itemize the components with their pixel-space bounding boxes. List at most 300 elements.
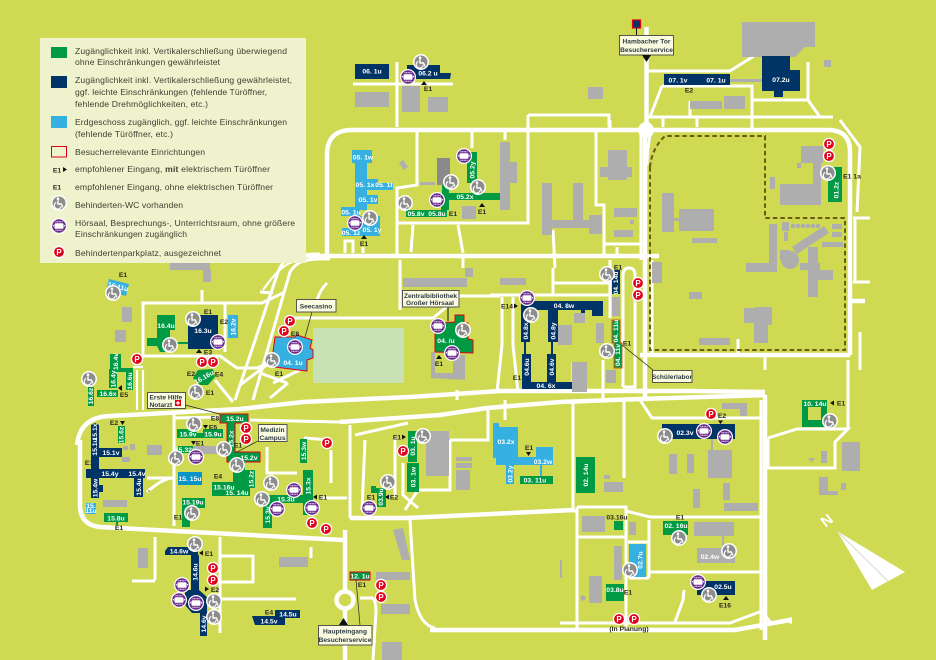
entrance E5 [118, 385, 128, 399]
building group 16.4v 16.4y 16.6u 16.6x: 16.4y [110, 370, 117, 388]
building group 15.3: 15.3x [305, 477, 312, 495]
icon: WC [206, 609, 222, 625]
icon: lecture hall [400, 69, 416, 85]
callout: Erste Hilfe Notarzt: Erste Hilfe [150, 394, 182, 402]
entrance E1: E1 [623, 340, 631, 348]
building 04.1u [273, 335, 313, 371]
icon: lecture hall [444, 345, 460, 361]
icon: WC [264, 352, 280, 368]
icon: WC [701, 587, 717, 603]
blue complex 05.1: 05. 1w [353, 154, 374, 162]
icon: lecture hall [347, 215, 363, 231]
building 15.11u: 11u [85, 508, 97, 515]
icon: parking: P [826, 140, 832, 149]
gate marker [632, 20, 640, 35]
building 15.8u [104, 513, 128, 525]
entrance E1: E1 [676, 514, 684, 522]
icon: WC [523, 307, 539, 323]
arrow: main entrance [339, 618, 348, 625]
blue complex 05.1: 05. 1v [359, 197, 378, 204]
callout: Seecasino [296, 300, 336, 337]
blue complex 05.1: 05. 1x [356, 182, 375, 189]
icon: parking: P [631, 615, 637, 624]
building 02.16u [663, 521, 688, 535]
entrance E16: E16 [719, 602, 731, 610]
building group 14.6: 14.6w [170, 548, 189, 556]
building 06.1u: 06. 1u [362, 68, 382, 76]
building group 15.3 [263, 439, 313, 528]
building group 16.4v 16.4y 16.6u 16.6x [97, 353, 134, 398]
icon: parking [632, 277, 644, 289]
buildings 03 [361, 423, 632, 601]
icon: parking: P [281, 327, 287, 336]
building 14.5v: 14.5v [260, 618, 278, 626]
legend: WC text: Behinderten-WC vorhanden [75, 200, 183, 210]
building 14.5u: 14.5u [279, 612, 297, 618]
icon: WC [657, 428, 673, 444]
legend panel [40, 38, 306, 263]
building 04.11: 04. 11u [613, 320, 620, 342]
icon: WC [162, 337, 178, 353]
entrance E2: E2 [718, 413, 726, 420]
entrance E1: E1 [424, 86, 432, 93]
building 04.1u: 04. 1u [283, 360, 303, 367]
icon: lecture hall [269, 501, 285, 517]
entrance E2 [385, 494, 398, 502]
legend: green swatch [51, 47, 67, 58]
entrance E8: E8 [211, 416, 219, 422]
icon: parking: P [826, 152, 832, 161]
callout: Schülerlabor [622, 345, 693, 382]
icon: lecture hall [188, 449, 204, 465]
icon: WC [81, 371, 97, 387]
building 15.2 red outlined: 15.2x [228, 430, 235, 448]
building 15.15u [178, 472, 202, 485]
leader line [356, 580, 360, 625]
building 03.11u: 03. 11u [524, 478, 546, 484]
entrance E2: E2 [685, 88, 693, 94]
callout: Haupteingang: Besucherservice [319, 637, 372, 644]
buildings 10 and 01 [802, 138, 861, 429]
roundabout north gate [638, 122, 654, 138]
building 16.6z: 16.6z [88, 387, 95, 404]
legend: green text [75, 46, 287, 67]
icon: parking: P [378, 581, 384, 590]
icon: WC [822, 413, 838, 429]
icon: WC [186, 416, 202, 432]
icon: parking: P [243, 435, 249, 444]
building 02.5u [697, 581, 735, 595]
entrance E1: E1 [478, 209, 486, 216]
building 02.3v: 02.3v [676, 430, 694, 437]
icon: WC [188, 384, 204, 400]
icon: parking [196, 356, 208, 368]
legend: lecture hall text: Einschränkungen zugänglich [75, 229, 187, 239]
callout: Medizin Campus: Medizin [260, 427, 285, 434]
icon: parking: P [243, 424, 249, 433]
buildings 04 [264, 264, 644, 390]
building 03.8u [606, 584, 624, 601]
entrance E5: E5 [120, 392, 128, 399]
icon: parking: P [309, 519, 315, 528]
legend: entrance with opener symbol: E1 [53, 168, 61, 174]
icon: parking [823, 150, 835, 162]
icon: parking: P [134, 355, 140, 364]
buildings 14 [165, 536, 300, 636]
main entrance area [339, 572, 387, 625]
legend: green text: ohne Einschränkungen gewährleistet [75, 57, 221, 67]
callout: Erste Hilfe Notarzt: Notarzt [150, 402, 173, 409]
icon: parking [705, 408, 717, 420]
building group 14.6 [165, 547, 208, 636]
building 04./u [435, 315, 473, 353]
entrance E1 [830, 400, 845, 408]
legend: navy text: ggf. leichte Einschränkungen (fehlende Türöffner, [75, 87, 267, 97]
building 03.8u: 03.8u [606, 587, 624, 594]
icon: lecture hall [188, 595, 204, 611]
icon: WC [184, 505, 200, 521]
building group 04.8 04.6: 04. 8w [554, 303, 575, 310]
entrance E1 [393, 434, 406, 442]
icon: WC [721, 543, 737, 559]
building 04.11: 04. 11v [615, 344, 622, 366]
icon: parking [320, 523, 332, 535]
building 15.19u [182, 498, 205, 527]
green complex 05.2: 05.8u [428, 211, 446, 218]
green complex 05.2: 05.2y [470, 161, 477, 179]
entrance E1 [478, 203, 486, 216]
building 16.3u: 16.3u [194, 328, 212, 335]
entrance E1 [525, 445, 533, 456]
entrance E1: E1 [393, 434, 401, 442]
building 07.1 [664, 74, 730, 85]
grey buildings [103, 22, 860, 660]
building 03.9u [371, 486, 386, 507]
blue complex 05.1: 05. 1z [342, 230, 361, 237]
icon: WC [671, 530, 687, 546]
building 03.2: 03.2x [497, 439, 515, 446]
icon: parking [321, 437, 333, 449]
callout: Haupteingang: Haupteingang [323, 628, 367, 636]
entrance E2: E2 [187, 371, 195, 378]
icon: lecture hall [304, 500, 320, 516]
icon: WC [599, 266, 615, 282]
building 07.1: 07. 1u [706, 78, 726, 84]
building 02.3v [662, 424, 735, 439]
callout: Erste Hilfe Notarzt [148, 392, 220, 414]
entrance E1: E1 [196, 440, 204, 448]
icon: parking [240, 422, 252, 434]
legend: navy swatch [51, 76, 67, 88]
entrance E1: E1 [367, 494, 375, 502]
entrance E2: E2 [211, 587, 219, 594]
building 15.11u [85, 503, 97, 515]
icon: WC [216, 441, 232, 457]
building 03.1u [408, 431, 417, 462]
building 03.1w: 03. 1w [410, 466, 417, 487]
icon: WC [415, 428, 431, 444]
north-east road end arrow [780, 617, 792, 624]
building 16.4u: 16.4u [157, 323, 175, 330]
legend: navy text: Zugänglichkeit inkl. Vertikalerschließung gewährleistet, [75, 75, 292, 85]
icon: lecture hall [717, 429, 733, 445]
building group 15.1 15.4: 15.4y [101, 471, 119, 478]
building group 16.4v 16.4y 16.6u 16.6x: 16.6x [99, 391, 117, 398]
entrance E5: E5 [209, 424, 217, 432]
icon: parking [397, 445, 409, 457]
building group 04.8 04.6: 04. 6x [537, 383, 556, 390]
building 16.11u: 16.11u [107, 282, 129, 293]
icon: parking [284, 315, 296, 327]
icon: WC [443, 174, 459, 190]
lawn rectangle [313, 328, 404, 383]
note: in planning: (In Planung) [609, 626, 649, 633]
entrance E2: E2 [110, 420, 118, 427]
entrance E1: E1 [119, 272, 127, 279]
entrance E1: E1 [275, 371, 283, 378]
entrance E4: E4 [265, 610, 273, 616]
icon: WC [168, 450, 184, 466]
building 15.2 red outlined [220, 414, 260, 462]
legend: parking icon: P [56, 248, 62, 257]
building 15.16u 15.14u 15.2z: 15.2z [249, 470, 256, 487]
legend: entrance text: empfohlener Eingang, ohne elektrischen Türöffner [75, 182, 273, 192]
building 03.16u [606, 514, 628, 530]
callout: Schülerlabor: Schülerlabor [652, 374, 693, 381]
entrance E1: E1 [204, 309, 212, 316]
icon: parking [613, 613, 625, 625]
building 03.1w [407, 463, 419, 492]
building 16.4u [147, 315, 188, 352]
building 02.16u: 02. 16u [664, 523, 688, 530]
legend: red outline text: Besucherrelevante Einrichtungen [75, 147, 205, 157]
legend: blue text: (fehlende Türöffner, etc.) [75, 129, 173, 139]
legend: blue text: Erdgeschoss zugänglich, ggf. leichte Einschränkungen [75, 117, 287, 127]
entrance E16 [719, 596, 731, 610]
legend: red outline swatch [52, 146, 66, 157]
callout: Hambacher Tor: Besucherservice [620, 47, 673, 54]
icon: parking: P [287, 317, 293, 326]
building group 15.1 15.4: 15.4u [136, 478, 143, 496]
icon: WC [254, 491, 270, 507]
building 02.7u: 02.7u [637, 551, 644, 569]
callout: Zentralbibliothek: Großer Hörsaal [406, 300, 454, 307]
icon: WC [187, 536, 203, 552]
building 03.9u: 03.9u [378, 488, 385, 506]
blue complex 05.1: 05. 1t [375, 182, 393, 189]
building 16.3u [188, 315, 218, 349]
entrance E1: E1 [837, 400, 845, 408]
building 03.1u: 03. 1u [410, 436, 417, 456]
icon: lecture hall [519, 290, 535, 306]
roundabout main entrance [336, 592, 354, 608]
building 02.14u [576, 457, 595, 493]
icon: parking: P [400, 447, 406, 456]
building group 04.8 04.6: 04.6v [549, 358, 556, 376]
icon: parking: P [324, 439, 330, 448]
building 03.2: 03.2w [534, 459, 553, 466]
legend: lecture hall text [75, 218, 295, 239]
building 03.16u: 03.16u [606, 514, 628, 522]
icon: parking: P [635, 291, 641, 300]
building group 16.4v 16.4y 16.6u 16.6x: 16.6u [127, 372, 134, 390]
icon: WC [105, 285, 121, 301]
icon: WC [820, 165, 836, 181]
icon: lecture hall [287, 339, 303, 355]
icon: WC [470, 179, 486, 195]
callout: Medizin Campus: Campus [259, 435, 286, 442]
entrance E1: E1 [205, 551, 213, 558]
icon: WC [362, 210, 378, 226]
building group 04.8 04.6: 04.6u [524, 358, 531, 376]
icon: WC [397, 195, 413, 211]
building 04./u: 04. /u [437, 338, 455, 345]
building 10.14u: 10. 14u [803, 401, 827, 408]
building group 04.8 04.6: 04.8y [550, 322, 557, 340]
building 02.7u [629, 544, 646, 577]
building 16.16u: 16.16u [194, 370, 215, 386]
building 15.8u: 15.8u [107, 516, 125, 522]
entrance E4: E4 [215, 372, 223, 378]
building group 15.1 15.4 [86, 423, 146, 498]
entrance E1: E1 [174, 514, 182, 522]
callout: Hambacher Tor [620, 36, 674, 62]
icon: WC [413, 54, 429, 70]
building 15.2 red outlined: 15.2u [226, 416, 244, 423]
building 15.9: 15.9v [179, 432, 197, 438]
building 16.2v [228, 315, 238, 338]
legend: blue swatch [51, 116, 67, 128]
building 10.14u [802, 400, 827, 427]
green complex 05.2: 05.2x [456, 194, 474, 201]
legend: lecture hall text: Hörsaal, Besprechungs-, Unterrichtsraum, ohne größere [75, 218, 295, 228]
entrance E1: E1 [449, 211, 457, 218]
building 15.15u: 15. 15u [178, 476, 202, 483]
icon: parking [306, 517, 318, 529]
green complex 05.2: 05.8v [407, 211, 425, 218]
icon: parking [628, 613, 640, 625]
entrance E1: E1 [360, 241, 368, 248]
north arrow [818, 511, 905, 590]
buildings 16 [81, 272, 238, 406]
building 01.2z [828, 167, 842, 202]
icon: lecture hall [361, 500, 377, 516]
building 04.11 [612, 320, 622, 368]
legend: entrance with opener text: empfohlener Eingang, mit elektrischem Türöffner [75, 164, 270, 174]
entrance E1: E1 [614, 264, 622, 272]
icon: parking: P [616, 615, 622, 624]
building 15.6z: 15.6z [119, 426, 126, 443]
legend: blue text [75, 117, 287, 139]
buildings 05 [341, 148, 500, 248]
entrance E1: E1 [115, 525, 123, 532]
label 02.4w: 02.4w [701, 554, 720, 561]
building group 15.3: 15.3y [265, 506, 272, 524]
north arrow: N [818, 511, 837, 531]
building 15.9 [177, 429, 223, 438]
building group 14.6: 14.6v [201, 615, 208, 633]
entrance E5 [203, 424, 217, 432]
building 15.9: 15.9u [204, 432, 222, 438]
green complex 05.2 [406, 152, 500, 218]
legend: WC icon [51, 195, 67, 211]
building 15.11u: 15. [86, 503, 96, 510]
entrance E2: E2 [390, 494, 398, 502]
callout: Zentralbibliothek: Zentralbibliothek [404, 293, 457, 300]
buildings 15 [85, 414, 333, 535]
callout: Medizin Campus [235, 424, 287, 453]
legend: entrance symbol: E1 [53, 184, 61, 192]
icon: parking: P [708, 410, 714, 419]
entrance E1 [313, 494, 327, 502]
building group 16.4v 16.4y 16.6u 16.6x: 16.4v [113, 353, 120, 370]
entrance E3 [196, 349, 212, 356]
dashed area outline [650, 136, 845, 350]
building 03.11u [520, 476, 553, 484]
legend: green text: Zugänglichkeit inkl. Vertikalerschließung überwiegend [75, 46, 287, 56]
entrance E1 [360, 235, 368, 248]
icon: WC [380, 474, 396, 490]
entrance E2 [110, 420, 125, 427]
icon: lecture hall [174, 577, 190, 593]
callout: Zentralbibliothek [402, 290, 459, 321]
building 01.2z: 01.2z [833, 181, 840, 198]
icon: lecture hall [429, 192, 445, 208]
buildings 07 [664, 56, 800, 97]
icon: parking: P [323, 525, 329, 534]
entrance E1: E1 [525, 445, 533, 452]
entrance E3: E3 [204, 350, 212, 356]
building 12.1u: 12. 1u [350, 574, 370, 580]
icon: WC [229, 457, 245, 473]
building 16.2v: 16.2v [231, 318, 238, 336]
building group 04.8 04.6 [521, 301, 603, 390]
entrance E1: E1 [319, 494, 327, 502]
entrance E1: E1 [624, 590, 632, 596]
entrance E2 [718, 413, 726, 424]
icon: WC [263, 475, 279, 491]
entrance E14: E14 [501, 304, 513, 310]
building 15.32u: 15.32u [175, 447, 196, 454]
buildings 02 [576, 408, 737, 633]
entrance E2: E2 [220, 319, 228, 326]
icon: parking: P [210, 576, 216, 585]
building 15.16u 15.14u 15.2z: 15. 14u [225, 490, 249, 497]
entrance E1: E1 [358, 582, 366, 589]
building group 15.3: 15.3w [301, 441, 308, 460]
entrance E4: E4 [214, 474, 222, 480]
blue complex 05.1: 05. 1u [341, 210, 361, 216]
icon: lecture hall [210, 334, 226, 350]
icon: lecture hall [690, 574, 706, 590]
building group 15.1 15.4: 15.4v [128, 471, 146, 478]
building 15.19u: 15.19u [182, 500, 204, 506]
blue complex 05.1 [341, 150, 393, 237]
building group 15.1 15.4: 15.4w [92, 478, 99, 497]
icon: parking [823, 138, 835, 150]
icon: parking: P [210, 564, 216, 573]
building group 04.8 04.6: 04.8x [523, 322, 530, 340]
icon: lecture hall [286, 482, 302, 498]
callout: Haupteingang [318, 626, 372, 645]
legend: entrance with opener symbol [53, 167, 67, 174]
icon: WC [622, 562, 638, 578]
icon: WC [185, 311, 201, 327]
building 07.2u: 07.2u [772, 77, 790, 84]
building 16.11u [106, 279, 129, 296]
icon: parking [240, 433, 252, 445]
building 03.2: 03.2y [507, 465, 514, 483]
